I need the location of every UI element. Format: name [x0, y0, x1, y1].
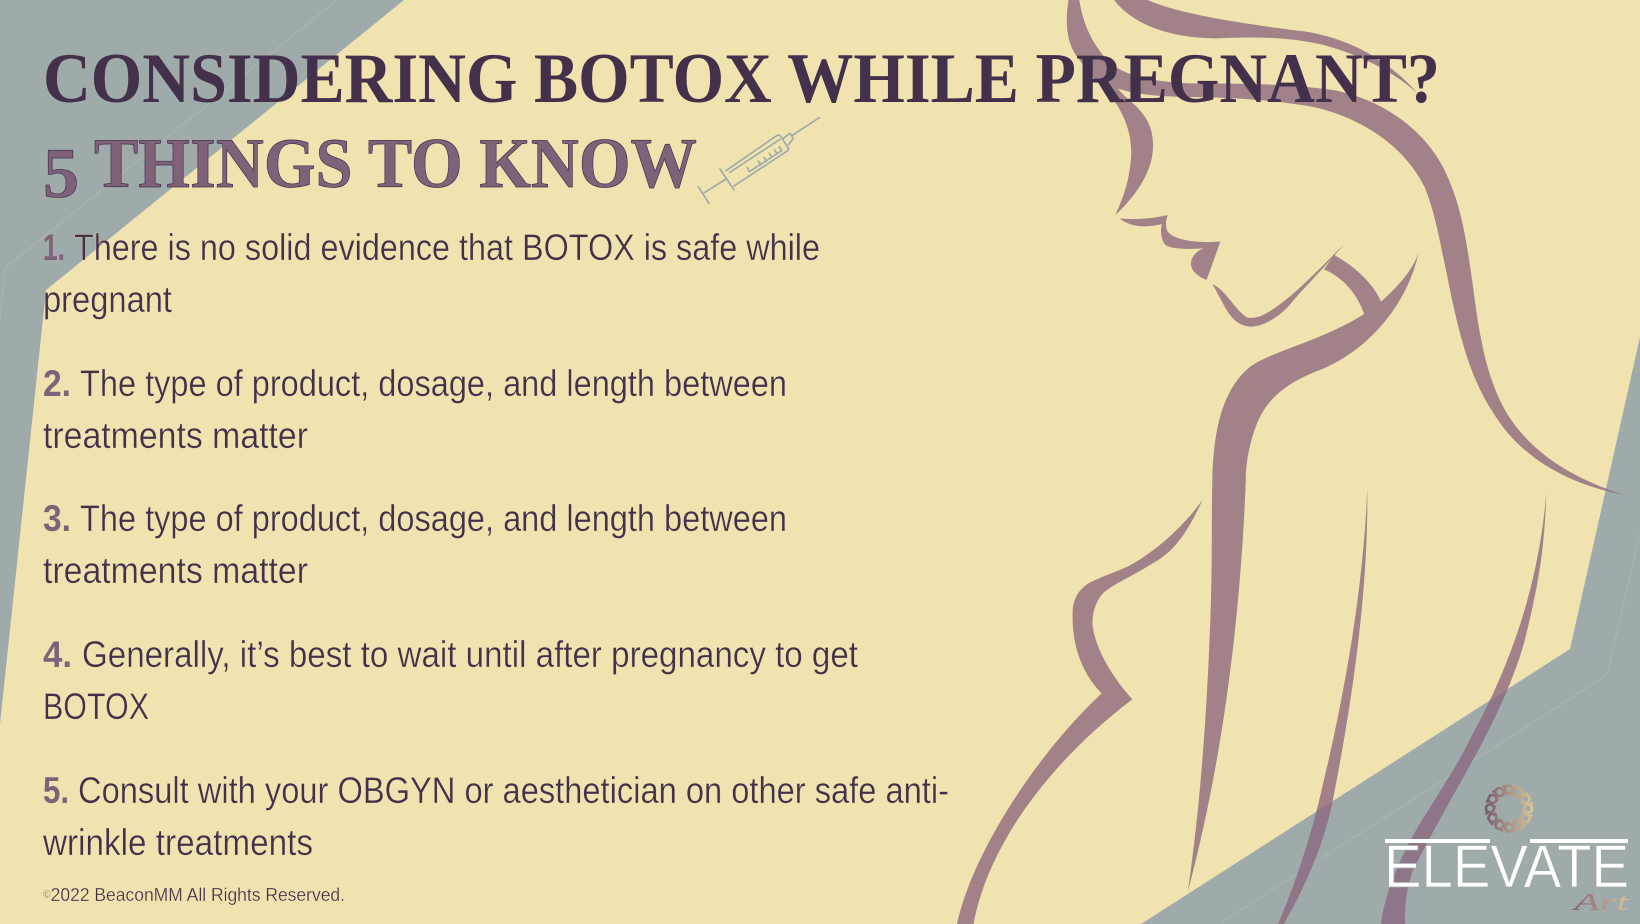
copyright: 2022 BeaconMM All Rights Reserved. — [51, 884, 345, 905]
item 5: wrinkle treatments — [42, 821, 313, 863]
title: CONSIDERING BOTOX WHILE PREGNANT? — [43, 40, 1440, 118]
top hair strand — [1114, 0, 1418, 93]
logo signature: Art — [1570, 890, 1630, 916]
right hair strand — [1381, 493, 1546, 924]
item 2: The type of product, dosage, and length between — [80, 362, 787, 404]
item 2: treatments matter — [43, 414, 308, 456]
item 4 — [43, 633, 859, 727]
item 4: 4. — [43, 633, 72, 675]
item 1: 1. — [43, 226, 65, 268]
copyright: © — [43, 889, 51, 901]
item 5: 5. — [43, 769, 69, 811]
item 4: BOTOX — [43, 685, 149, 727]
item 3 — [43, 497, 787, 591]
logo: Elevate — [1384, 786, 1630, 916]
breast and belly line — [957, 500, 1203, 924]
item 2: 2. — [43, 362, 71, 404]
logo wordmark: ELEVATE — [1384, 833, 1629, 900]
pregnant woman silhouette — [957, 0, 1624, 924]
item 2 — [43, 362, 787, 456]
icon: syringe — [698, 118, 819, 203]
bottom-right gray shape — [1141, 337, 1640, 924]
item 3: The type of product, dosage, and length between — [80, 497, 787, 539]
top-left gray shape — [0, 0, 404, 724]
item 1 — [43, 226, 820, 320]
item 3: treatments matter — [43, 549, 308, 591]
subtitle: THINGS TO KNOW — [94, 125, 697, 203]
item 5 — [42, 769, 949, 863]
item 1: There is no solid evidence that BOTOX is safe while — [74, 226, 820, 268]
logo bar — [1385, 839, 1628, 843]
item 4: Generally, it’s best to wait until after pregnancy to get — [82, 633, 859, 675]
item 1: pregnant — [43, 278, 173, 320]
neck and long body line — [1188, 252, 1419, 892]
item 3: 3. — [43, 497, 71, 539]
middle hair strand — [1278, 488, 1367, 924]
logo emblem — [1486, 786, 1532, 832]
item 5: Consult with your OBGYN or aesthetician on other safe anti- — [78, 769, 949, 811]
chin and jaw — [1212, 244, 1344, 327]
hair and forehead band — [1067, 0, 1624, 495]
lips — [1119, 215, 1220, 280]
subtitle: 5 — [43, 135, 79, 213]
